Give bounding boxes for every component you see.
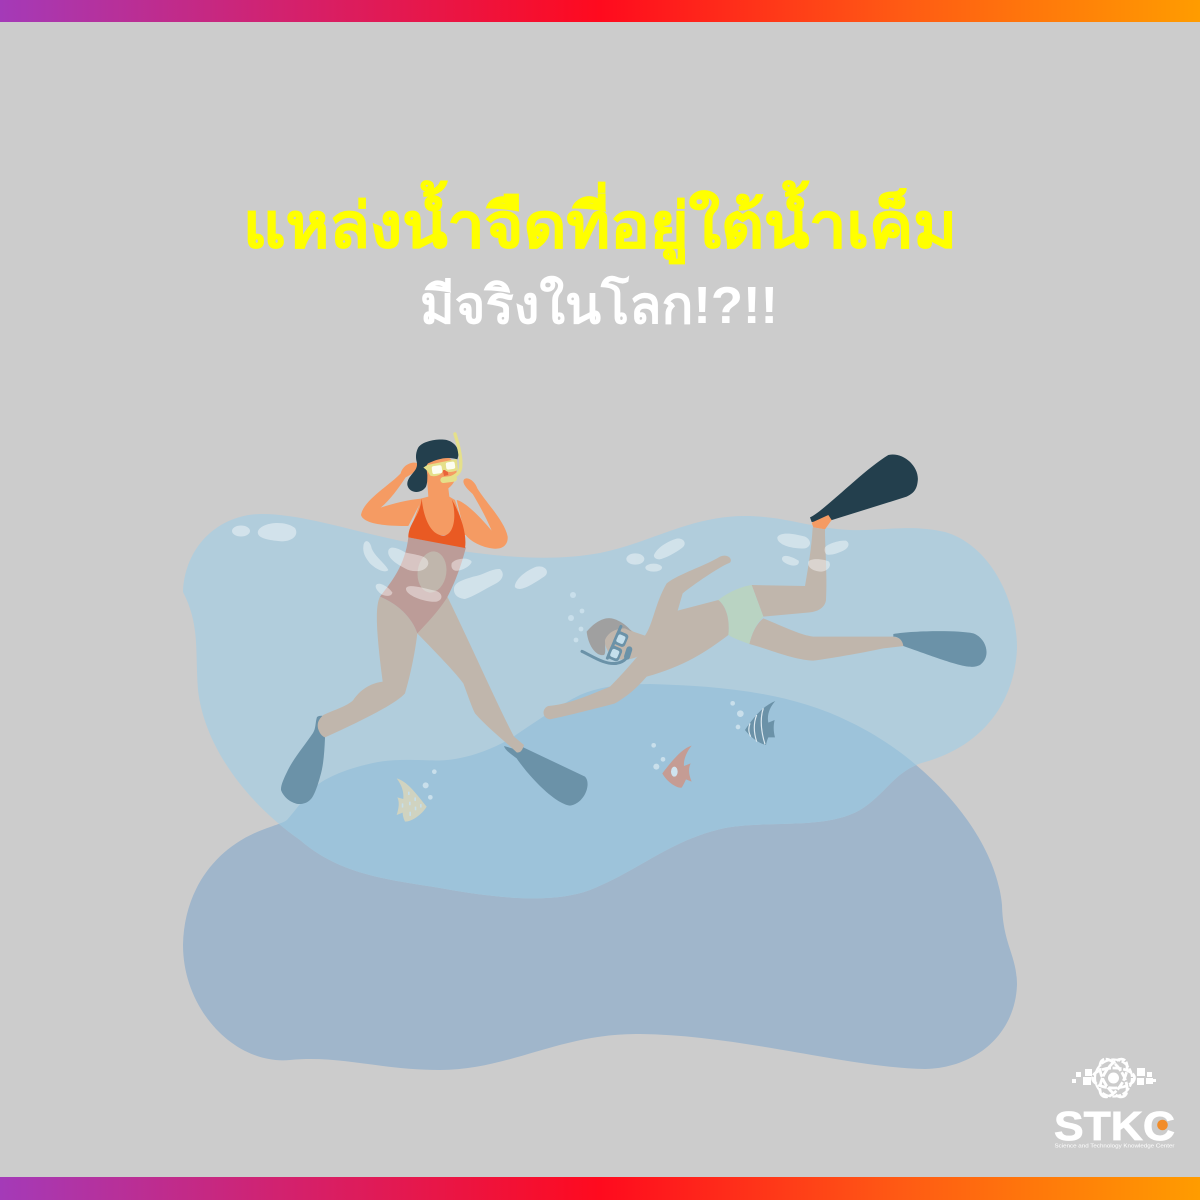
subtitle: white headline: มีจริงในโลก!?!! [420,274,778,335]
logo tagline: Science and Technology Knowledge Center [1054,1144,1175,1150]
snorkel [582,649,629,664]
fish: striped [730,701,775,745]
swimmer: woman [281,434,588,806]
upper water blob: fresh water [183,514,1017,898]
fish: pale spotted [397,769,437,822]
bubbles near man's head [568,592,584,642]
mask [605,625,632,664]
hair [407,439,458,492]
STKC logo [1054,1055,1175,1150]
left arm [361,463,423,526]
torso and arms [544,556,731,719]
front leg [417,597,524,752]
back leg [318,597,417,737]
foot above water [812,515,832,529]
goggles [423,459,458,476]
logo atom core [1108,1072,1119,1084]
head [605,628,645,660]
fish bubbles [730,701,744,729]
snorkel [445,434,461,479]
front fin [504,746,588,806]
fish: pink [651,743,692,788]
right arm [457,478,508,549]
logo orange dot [1157,1120,1168,1130]
lower water blob: salt water [183,684,1017,1070]
back fin [281,716,325,804]
logo atom icon [1092,1055,1134,1101]
hair [587,618,632,655]
fish bubbles [423,769,437,800]
top gradient bar [0,0,1200,22]
fish spots [402,792,422,816]
bottom gradient bar [0,1177,1200,1200]
straight-leg fin [893,631,987,667]
chest and neck [408,455,466,535]
water surface highlights, left [232,523,296,541]
underwater arm [415,550,449,594]
shorts [718,585,763,644]
fish stripes [749,708,765,744]
goggle lenses [431,461,455,474]
swimsuit below water [380,537,466,633]
fish bubbles [651,743,665,770]
logo pixel squares [1072,1068,1156,1085]
splashes around woman [363,541,547,602]
splashes around man [626,534,849,572]
bent leg [752,527,826,617]
title: yellow headline: แหล่งน้ำจืดที่อยู่ใต้น้ำเค็ม [243,180,957,264]
lips [443,469,448,476]
logo wordmark: STKC [1054,1103,1175,1149]
overlap of the two water bodies [279,684,916,898]
swimsuit above water [408,498,465,548]
straight leg [749,618,904,661]
swimmer: man [544,455,987,719]
raised fin [810,455,918,522]
